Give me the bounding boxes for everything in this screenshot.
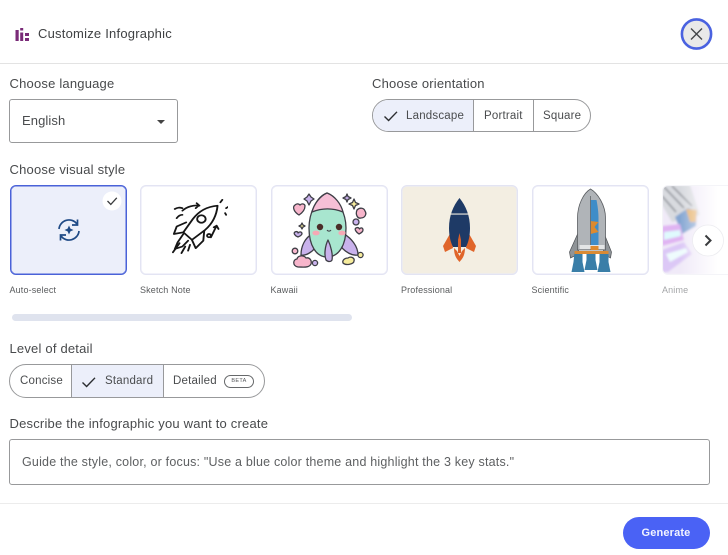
standard label: Standard — [105, 375, 153, 387]
scientific rocket — [569, 188, 612, 272]
landscape label: Landscape — [406, 110, 464, 122]
detailed label: Detailed — [173, 375, 217, 387]
anime rocket art — [663, 186, 703, 274]
kawaii rocket — [292, 192, 366, 268]
dropdown caret — [157, 120, 165, 124]
concise label: Concise — [20, 375, 63, 387]
generate button: Generate — [642, 527, 690, 539]
auto-select icon — [58, 219, 80, 241]
language dropdown — [9, 99, 178, 143]
caption: anime: Anime — [662, 285, 688, 295]
check badge — [102, 192, 122, 210]
caption: sketch note: Sketch Note — [140, 285, 191, 295]
close button — [680, 18, 712, 50]
footer divider — [0, 503, 728, 504]
check icon — [384, 112, 398, 122]
professional rocket — [443, 198, 476, 262]
orientation toggle — [372, 99, 591, 132]
heading: choose language: Choose language — [10, 76, 114, 91]
dropdown value: English — [22, 113, 65, 128]
card: professional — [401, 185, 518, 275]
heading: level of detail: Level of detail — [10, 341, 93, 356]
option: detailed — [173, 375, 254, 388]
carousel next button — [692, 224, 724, 256]
card: kawaii — [271, 185, 388, 275]
carousel scrollbar — [12, 314, 352, 320]
caption: scientific: Scientific — [532, 285, 569, 295]
generate button — [622, 517, 710, 549]
option: landscape — [373, 100, 474, 131]
option: portrait — [474, 100, 534, 131]
check icon — [82, 378, 96, 388]
beta badge: BETA — [231, 378, 247, 384]
portrait label: Portrait — [484, 110, 523, 122]
card: scientific — [532, 185, 648, 275]
option: standard — [72, 365, 164, 397]
card: sketch note — [140, 185, 257, 275]
heading: choose orientation: Choose orientation — [372, 76, 485, 91]
header divider — [0, 63, 728, 64]
square label: Square — [543, 110, 581, 122]
placeholder text: Guide the style, color, or focus: "Use a blue color theme and highlight the 3 key stats." — [22, 455, 514, 469]
caption: professional: Professional — [401, 285, 452, 295]
title: Customize Infographic — [38, 26, 172, 41]
sketch rocket — [172, 199, 228, 254]
card: anime — [662, 185, 728, 275]
card: auto-select — [10, 185, 126, 275]
header icon: bars — [16, 28, 29, 41]
description input — [9, 439, 710, 485]
detail toggle — [9, 364, 265, 398]
beta badge — [224, 375, 254, 388]
caption: auto-select: Auto-select — [10, 285, 56, 295]
heading: choose visual style: Choose visual style — [10, 162, 125, 177]
option: concise — [10, 365, 72, 397]
caption: kawaii: Kawaii — [270, 285, 298, 295]
heading: describe the infographic: Describe the infographic you want to create — [10, 416, 268, 431]
